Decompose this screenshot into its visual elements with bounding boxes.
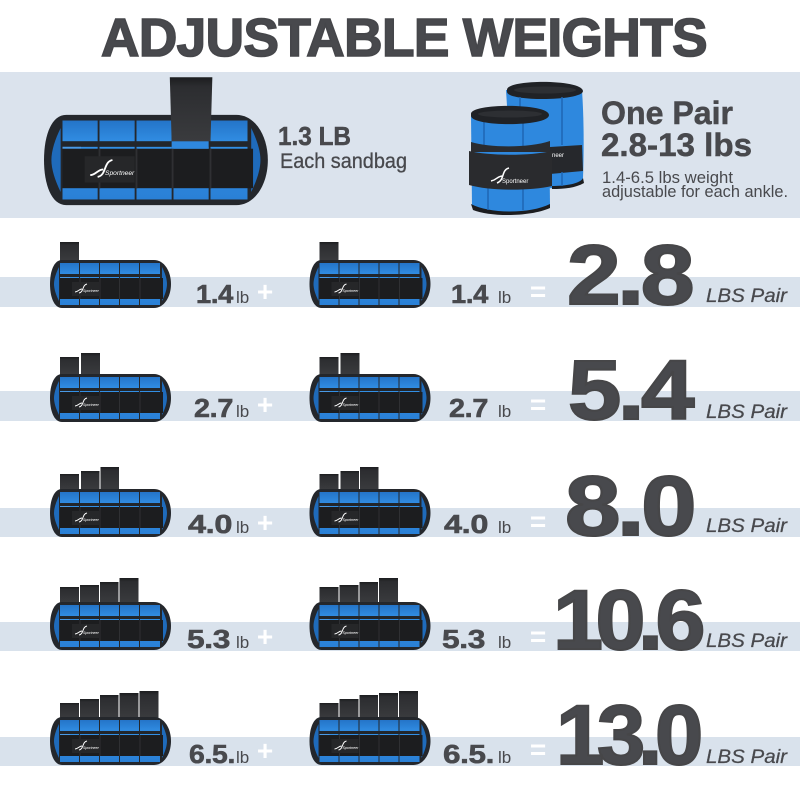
total weight: 8.0 [565,459,693,553]
row 4: 10.6 lbs pair [0,573,800,667]
left weight value: 1.4 [196,279,234,309]
equals sign: = [530,734,546,765]
right weight value [449,393,511,423]
left ankle weight with 1 sandbag: Sportneer [83,289,100,293]
right weight value: lb [498,633,511,652]
left weight value: 2.7 [194,393,233,423]
text: one pair range: 1.4-6.5 lbs weight [602,168,733,187]
right ankle weight with 4 sandbags: Sportneer [342,631,359,635]
text: each sandbag weight [278,121,407,173]
unit label: LBS Pair [706,630,789,652]
left ankle weight with 2 sandbags [50,353,171,422]
right weight value: 5.3 [442,624,485,654]
right weight value [443,739,511,769]
left ankle weight with 5 sandbags [50,691,171,765]
equals sign: = [530,276,546,307]
left ankle weight with 3 sandbags: Sportneer [83,518,100,522]
panel: header band [0,72,800,218]
right ankle weight with 4 sandbags [310,578,430,650]
left weight value: 6.5. [189,739,235,769]
plus sign: + [257,276,273,307]
total weight: 10.6 [553,573,703,667]
right weight value [451,279,511,309]
left ankle weight with 5 sandbags: Sportneer [83,746,100,750]
right ankle weight with 2 sandbags [310,353,430,422]
total weight: 2.8 [567,228,692,322]
plus sign: + [257,621,273,652]
right ankle weight with 3 sandbags: Sportneer [342,518,359,522]
image: opened ankle weight with one sandbag: Sportneer [105,170,135,177]
row 3: 8.0 lbs pair [0,459,800,553]
right weight value [444,509,511,539]
right ankle weight with 1 sandbag: Sportneer [342,289,359,293]
text: each sandbag weight: 1.3 LB [278,121,351,151]
text: one pair range [601,95,788,201]
left ankle weight with 1 sandbag [50,242,171,308]
text: each sandbag weight: Each sandbag [280,150,407,173]
text: one pair range: adjustable for each ankle. [602,182,788,201]
equals sign: = [530,621,546,652]
right weight value: 4.0 [444,509,488,539]
right weight value: lb [498,288,511,307]
left ankle weight with 4 sandbags: Sportneer [83,631,100,635]
row 1: 2.8 lbs pair [0,228,800,322]
left ankle weight with 4 sandbags [50,578,171,650]
right weight value: lb [498,402,511,421]
right ankle weight with 5 sandbags [310,691,430,765]
plus sign: + [257,389,273,420]
row 5: 13.0 lbs pair [0,688,800,782]
left weight value: lb [236,633,249,652]
left weight value: lb [236,748,249,767]
text: one pair range: One Pair [601,95,733,131]
row 2: 5.4 lbs pair [0,343,800,437]
left weight value: 5.3 [187,624,230,654]
plus sign: + [257,507,273,538]
right ankle weight with 2 sandbags: Sportneer [342,403,359,407]
left weight value: 4.0 [188,509,232,539]
right ankle weight with 5 sandbags: Sportneer [342,746,359,750]
left ankle weight with 2 sandbags: Sportneer [83,403,100,407]
plus sign: + [257,735,273,766]
left weight value [187,624,249,654]
image: pair of ankle weights: Sportneer [502,179,528,185]
right weight value: lb [498,748,511,767]
title: ADJUSTABLE WEIGHTS [101,8,707,68]
left weight value [194,393,249,423]
equals sign: = [530,389,546,420]
total weight: 13.0 [556,688,700,782]
left weight value: lb [236,402,249,421]
left weight value: lb [236,288,249,307]
unit label: LBS Pair [706,401,789,423]
total weight: 5.4 [568,343,695,437]
left weight value [196,279,249,309]
right ankle weight with 1 sandbag [310,242,430,308]
image: pair of ankle weights: neer [552,153,564,159]
unit label: LBS Pair [706,515,789,537]
left weight value: lb [236,518,249,537]
equals sign: = [530,506,546,537]
unit label: LBS Pair [706,285,789,307]
right weight value: 2.7 [449,393,488,423]
right weight value: 6.5. [443,739,494,769]
right weight value: 1.4 [451,279,489,309]
text: one pair range: 2.8-13 lbs [601,127,752,163]
right weight value: lb [498,518,511,537]
image: opened ankle weight with one sandbag [44,77,268,205]
image: pair of ankle weights [469,82,584,215]
right ankle weight with 3 sandbags [310,467,430,537]
left weight value [188,509,249,539]
right weight value [442,624,511,654]
unit label: LBS Pair [706,746,789,768]
left ankle weight with 3 sandbags [50,467,171,537]
